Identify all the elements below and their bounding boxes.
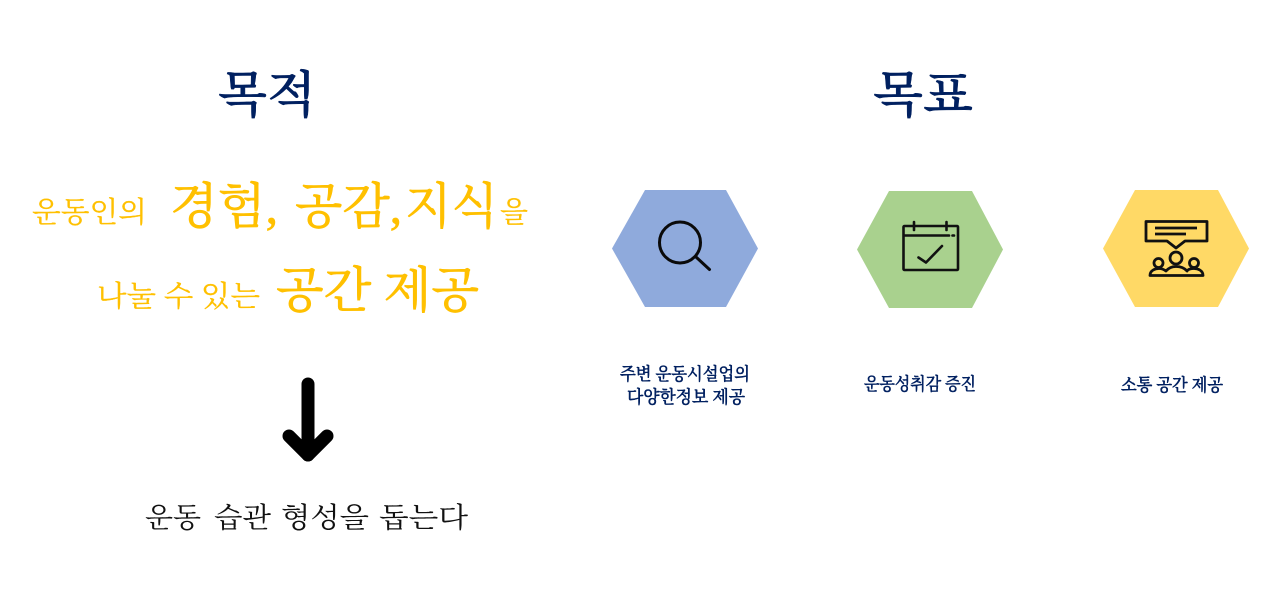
icon: calendar with check xyxy=(904,222,958,270)
panel: search hexagon xyxy=(612,190,758,307)
heading: goals: 목표 xyxy=(873,67,973,123)
icon: people with speech bubble xyxy=(1146,222,1207,276)
purpose statement: 공간 제공 xyxy=(276,263,479,318)
purpose statement: 나눌 수 있는 xyxy=(97,280,260,313)
purpose statement: 운동인의 xyxy=(32,196,147,229)
label: nearby facility information: 주변 운동시설업의 xyxy=(620,364,750,384)
purpose statement: 공감, xyxy=(295,179,402,234)
label: nearby facility information xyxy=(620,364,750,407)
result text: 형성을 xyxy=(281,502,369,534)
purpose statement: 지식 xyxy=(405,179,498,234)
result text: 돕는다 xyxy=(379,502,468,534)
icon: magnifier xyxy=(660,222,710,270)
arrow: down xyxy=(289,384,327,455)
purpose statement xyxy=(32,179,528,318)
purpose statement: 경험, xyxy=(170,179,278,234)
panel: communication hexagon xyxy=(1103,190,1249,307)
heading: purpose: 목적 xyxy=(218,67,316,123)
result text: 운동 xyxy=(145,503,201,534)
label: nearby facility information: 다양한정보 제공 xyxy=(627,387,745,407)
label: communication space: 소통 공간 제공 xyxy=(1121,375,1223,395)
label: sense of achievement: 운동성취감 증진 xyxy=(864,374,976,394)
result text xyxy=(145,502,468,534)
panel: calendar hexagon xyxy=(857,191,1003,308)
purpose statement: 을 xyxy=(500,197,528,229)
result text: 습관 xyxy=(214,502,271,534)
